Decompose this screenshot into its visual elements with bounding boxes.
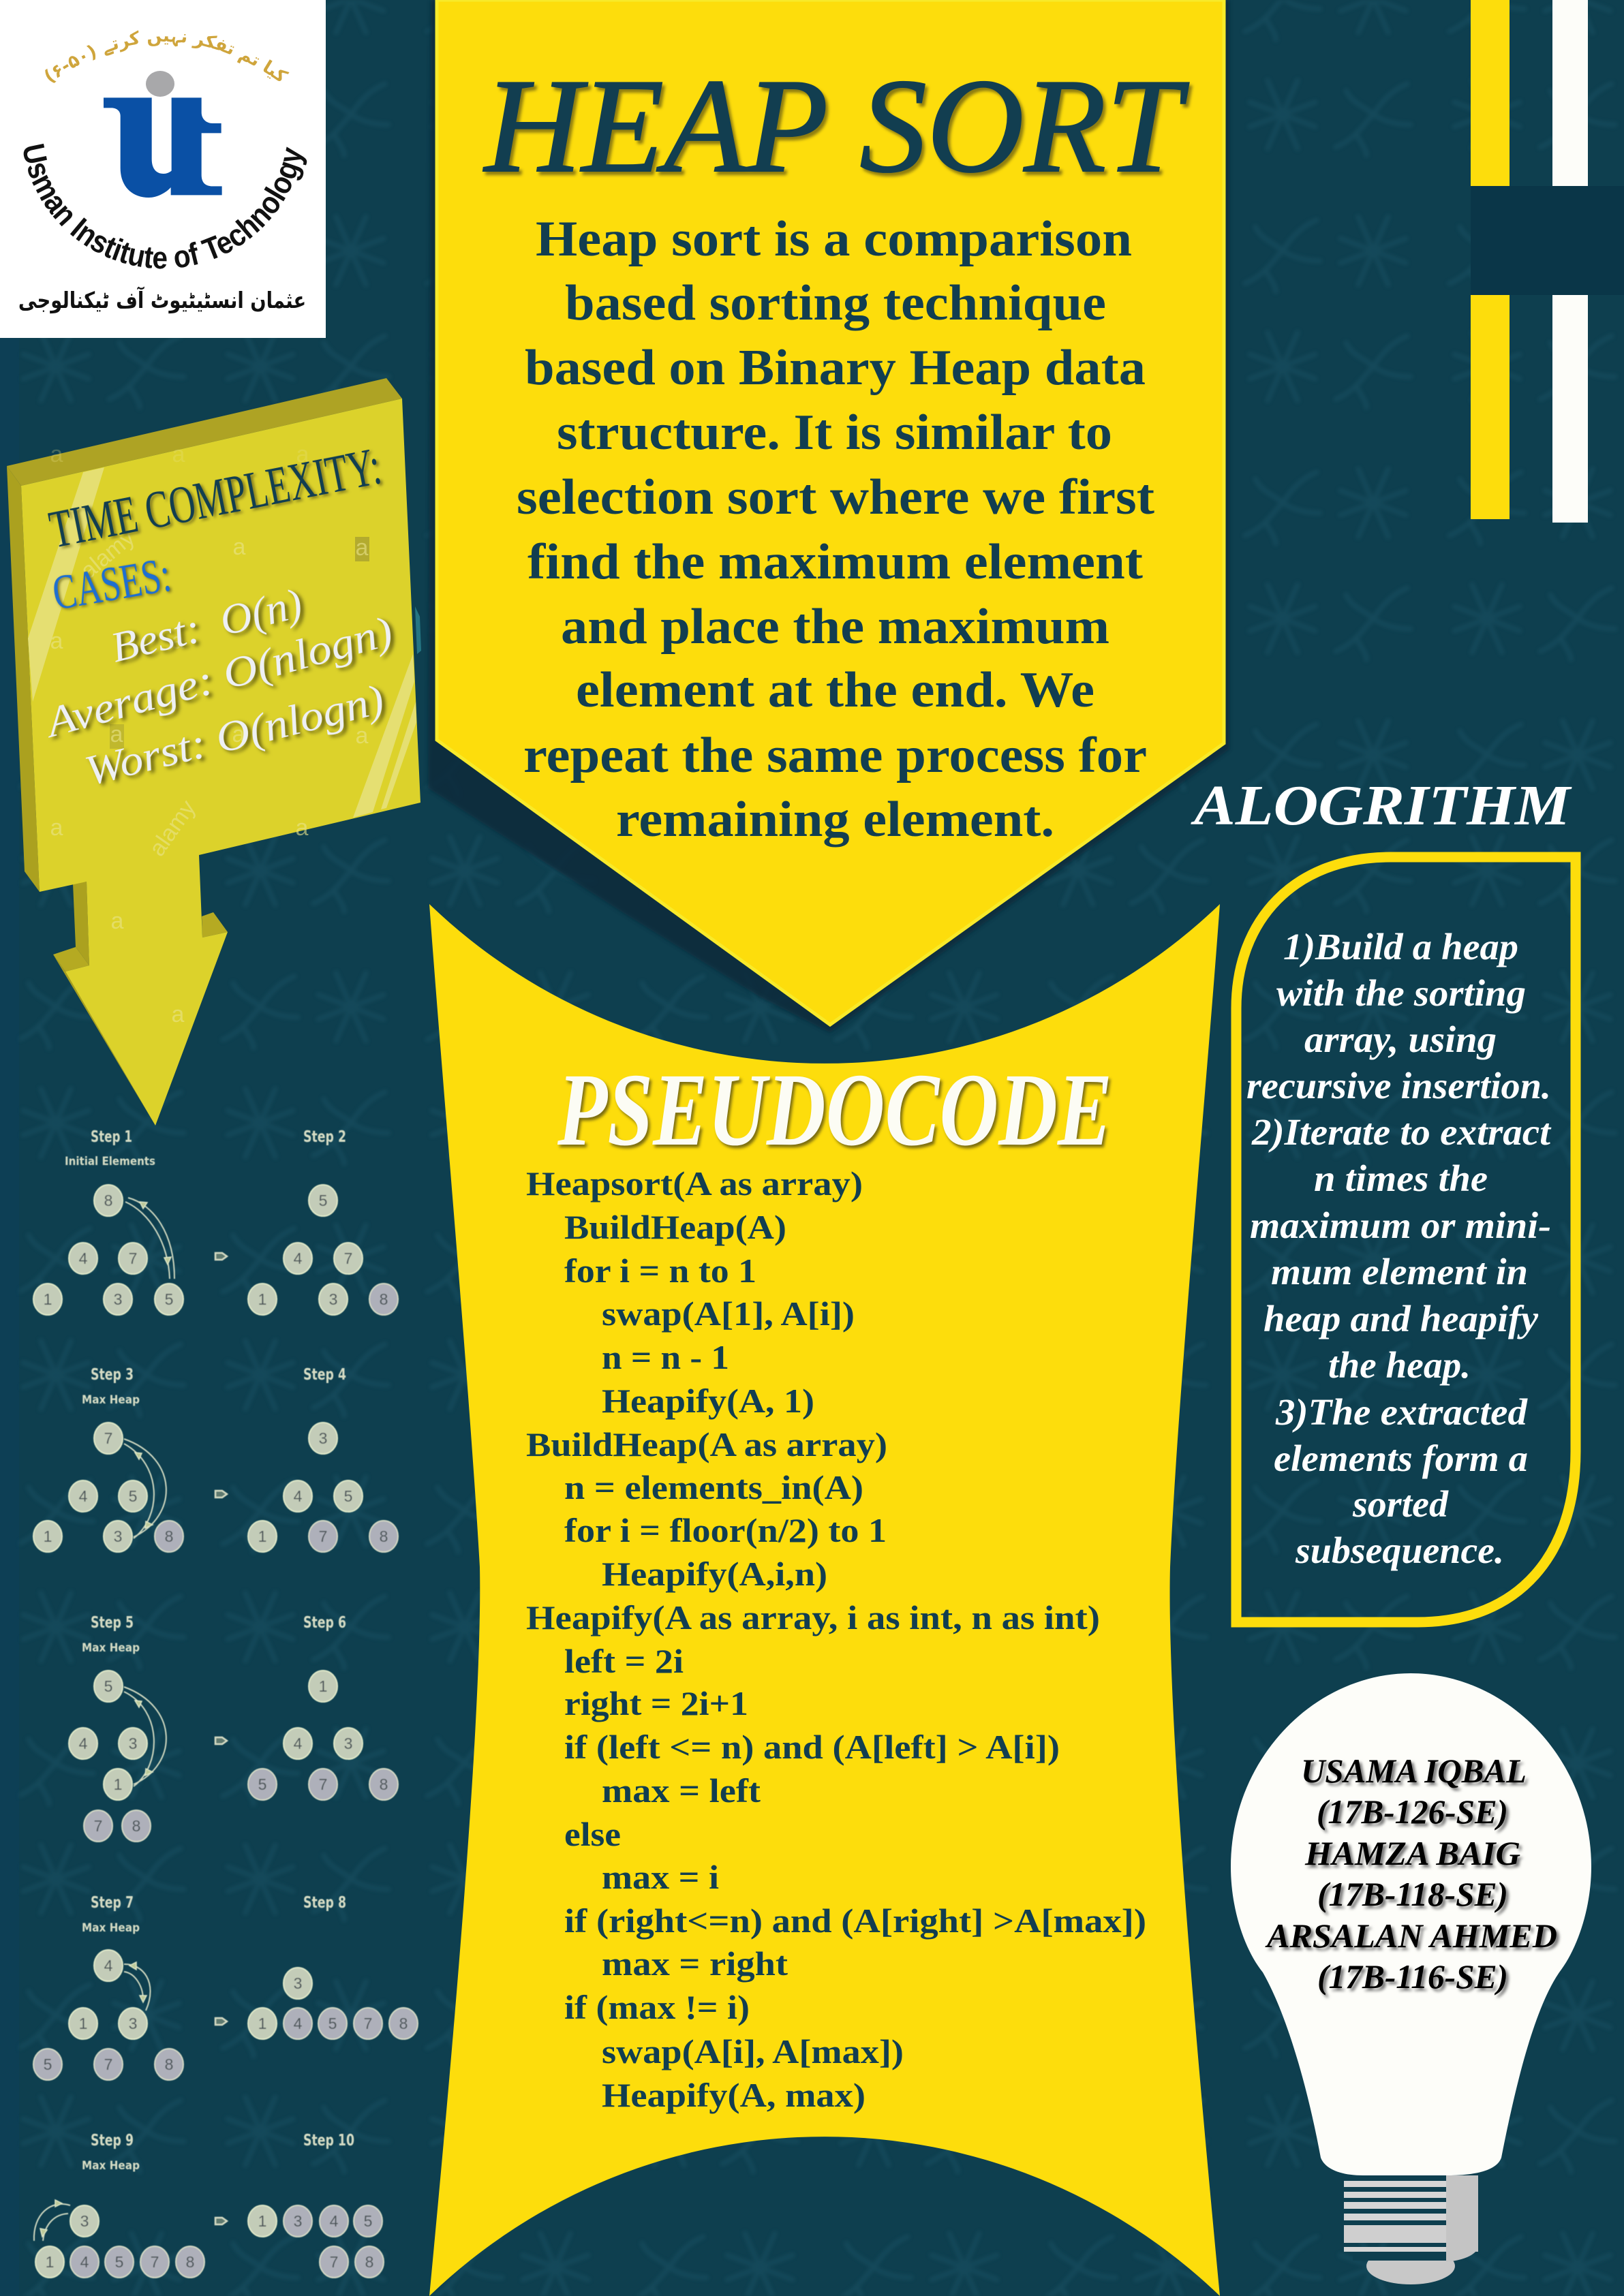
step 2: 1 [258, 1290, 266, 1308]
step 9: 7 [151, 2253, 159, 2271]
algorithm text: 1)Build a heap [1283, 926, 1518, 967]
step 1 [33, 1128, 183, 1315]
step 6: 7 [319, 1775, 327, 1793]
worst case: Worst: O(nlogn) [80, 677, 388, 795]
sign: watermarks: alamy [76, 525, 140, 584]
step 9: Max Heap [82, 2159, 140, 2173]
team names: (17B-118-SE) [1317, 1875, 1508, 1913]
step 3 [33, 1366, 183, 1552]
arrow [215, 2218, 227, 2224]
step 1: 8 [104, 1192, 112, 1209]
step 2: 8 [380, 1290, 388, 1308]
step 9: 5 [115, 2253, 123, 2271]
algorithm text: sorted [1352, 1483, 1450, 1525]
step 7: 7 [104, 2055, 112, 2073]
algorithm text: n times the [1314, 1158, 1488, 1199]
algorithm text: subsequence. [1295, 1530, 1504, 1571]
step 8 [248, 1894, 418, 2039]
sign: watermarks: a [50, 628, 63, 654]
step 2: 7 [344, 1250, 352, 1267]
step 9: 8 [186, 2253, 194, 2271]
sign: watermarks [50, 441, 369, 1027]
pseudocode lines: BuildHeap(A) [564, 1208, 786, 1246]
description text: selection sort where we first [517, 469, 1154, 525]
step 8: 8 [399, 2015, 408, 2032]
team names: USAMA IQBAL [1301, 1752, 1527, 1790]
step 3: Max Heap [82, 1393, 140, 1407]
algorithm text: 2)Iterate to extract [1251, 1111, 1552, 1153]
sign: watermarks: alamy [144, 796, 201, 861]
step 2: Step 2 [303, 1128, 346, 1146]
step 4 [248, 1366, 398, 1552]
pseudocode lines [526, 1164, 1146, 2114]
step 6: 4 [294, 1735, 303, 1752]
description text: repeat the same process for [523, 728, 1147, 784]
logo panel [0, 0, 326, 338]
logo: Urdu motto: کیا تم تفکر نہیں کرتے (۵۰-۶) [45, 30, 289, 83]
algorithm text: the heap. [1328, 1344, 1471, 1386]
logo: Urdu name: عثمان انسٹیٹیوٹ آف ٹیکنالوجی [18, 286, 306, 314]
algorithm text: maximum or mini- [1250, 1205, 1551, 1246]
pseudocode lines: Heapify(A as array, i as int, n as int) [526, 1598, 1100, 1636]
step 3: 1 [44, 1527, 52, 1545]
step 4: 5 [344, 1487, 352, 1505]
sign: watermarks: a [111, 908, 124, 934]
pseudocode lines: max = right [602, 1944, 788, 1983]
description text: structure. It is similar to [557, 405, 1112, 461]
step 8: 4 [294, 2015, 303, 2032]
step 8: 3 [294, 1974, 302, 1992]
step 1: 5 [165, 1290, 173, 1308]
step 8: 7 [364, 2015, 372, 2032]
sign: watermarks: a [296, 441, 309, 467]
step 5: 7 [94, 1817, 102, 1835]
description text: Heap sort is a comparison [536, 211, 1132, 267]
step 4: Step 4 [303, 1366, 346, 1384]
step 8: 1 [258, 2015, 266, 2032]
pseudocode lines: left = 2i [564, 1642, 684, 1680]
banner shadow [428, 0, 1229, 1033]
step 8: Step 8 [303, 1894, 346, 1912]
algorithm text: with the sorting [1276, 972, 1526, 1014]
pseudocode lines: for i = floor(n/2) to 1 [564, 1511, 887, 1549]
step 1: 3 [114, 1290, 122, 1308]
step 3: 8 [165, 1527, 173, 1545]
description text: remaining element. [616, 792, 1054, 848]
step 3: Step 3 [91, 1366, 134, 1384]
step 9: 1 [46, 2253, 54, 2271]
step 10: 3 [294, 2212, 302, 2230]
step 3: 3 [114, 1527, 122, 1545]
step 7: 4 [104, 1957, 113, 1974]
step 4: 1 [258, 1527, 266, 1545]
panel: heap sort banner [428, 0, 1229, 1033]
step 10: Step 10 [303, 2132, 354, 2150]
step 10: 1 [258, 2212, 266, 2230]
step 2: 4 [294, 1250, 303, 1267]
description text [517, 211, 1154, 848]
description text: and place the maximum [561, 599, 1109, 655]
step 7: Step 7 [91, 1894, 134, 1912]
pseudocode lines: n = elements_in(A) [564, 1468, 863, 1506]
sign heading: time complexity: TIME COMPLEXITY: [44, 436, 386, 559]
team names [1265, 1752, 1557, 1996]
step 6: 8 [380, 1775, 388, 1793]
arrow [215, 1253, 227, 1260]
step 10: 8 [365, 2253, 373, 2271]
algorithm text: mum element in [1271, 1251, 1528, 1292]
step 1: Step 1 [91, 1128, 132, 1146]
algorithm text: array, using [1304, 1019, 1497, 1060]
sign: watermarks: a [233, 534, 246, 560]
sign: watermarks: a [50, 815, 63, 841]
step 6: 5 [258, 1775, 266, 1793]
step 5: Max Heap [82, 1641, 140, 1655]
pseudocode lines: if (right<=n) and (A[right] >A[max]) [564, 1902, 1146, 1940]
sign: watermarks: a [172, 1002, 185, 1027]
description text: based sorting technique [565, 275, 1106, 331]
step 5: Step 5 [91, 1614, 134, 1632]
step 1: 7 [129, 1250, 137, 1267]
pseudocode lines: max = left [602, 1771, 761, 1810]
step 8: 5 [328, 2015, 337, 2032]
step 3: 4 [79, 1487, 88, 1505]
bulb glass [1231, 1673, 1591, 2175]
description text: element at the end. We [576, 662, 1094, 718]
pseudocode lines: Heapify(A, max) [602, 2076, 865, 2114]
decorative stripes top right [1471, 0, 1624, 523]
pseudocode lines: Heapsort(A as array) [526, 1164, 863, 1203]
title: HEAP SORT [482, 51, 1189, 200]
description text: based on Binary Heap data [525, 340, 1146, 396]
step 5 [69, 1614, 166, 1842]
pseudocode lines: Heapify(A, 1) [602, 1382, 814, 1420]
step 6: 3 [344, 1735, 352, 1752]
logo: UT mark [104, 71, 222, 198]
sign: watermarks: a [172, 628, 185, 654]
pseudocode lines: right = 2i+1 [564, 1684, 748, 1722]
step 7: 5 [44, 2055, 52, 2073]
team names: (17B-126-SE) [1317, 1793, 1508, 1831]
pseudocode lines: swap(A[i], A[max]) [602, 2032, 904, 2070]
team names: (17B-116-SE) [1317, 1957, 1508, 1996]
algorithm text: heap and heapify [1263, 1298, 1539, 1339]
logo: institute name on arc: Usman Institute of Technology [23, 143, 307, 269]
algorithm text: 3)The extracted [1275, 1391, 1529, 1433]
step 9: Step 9 [91, 2132, 134, 2150]
sign: watermarks: a [356, 535, 369, 561]
pseudocode lines: swap(A[1], A[i]) [602, 1294, 855, 1333]
team names: ARSALAN AHMED [1265, 1917, 1557, 1955]
algorithm frame [1236, 857, 1576, 1622]
best case: Best: O(n) [106, 580, 307, 672]
step 6: 1 [319, 1677, 327, 1695]
step 9 [34, 2132, 204, 2278]
pseudocode lines: else [564, 1815, 621, 1853]
panel: pseudocode [429, 904, 1220, 2296]
step 4: 8 [380, 1527, 388, 1545]
sign: watermarks: a [232, 722, 245, 747]
step 4: 4 [294, 1487, 303, 1505]
sign: watermarks: a [110, 722, 123, 747]
arrow [215, 2018, 227, 2025]
step 1: 4 [79, 1250, 88, 1267]
arrow [215, 1737, 227, 1744]
pseudocode lines: BuildHeap(A as array) [526, 1425, 887, 1463]
step 5: 4 [79, 1735, 88, 1752]
pseudocode lines: Heapify(A,i,n) [602, 1555, 827, 1593]
heading: algorithm: ALOGRITHM [1191, 774, 1573, 837]
algorithm text: elements form a [1274, 1438, 1528, 1479]
sign: watermarks: a [356, 723, 369, 749]
step 9: 4 [80, 2253, 89, 2271]
step 3: 5 [129, 1487, 137, 1505]
sign: watermarks: a [296, 815, 309, 841]
step 3: 7 [104, 1429, 112, 1447]
step 5: 1 [114, 1775, 122, 1793]
pseudocode background shape [429, 904, 1220, 2296]
pseudocode lines: max = i [602, 1858, 719, 1896]
heap sort step diagrams [33, 1128, 418, 2278]
step 5: 3 [129, 1735, 137, 1752]
sign: watermarks: a [50, 441, 63, 467]
step 10: 5 [364, 2212, 372, 2230]
description text: find the maximum element [527, 534, 1143, 590]
step 2 [248, 1128, 398, 1315]
step 7: 8 [165, 2055, 173, 2073]
pseudocode heading: PSEUDOCODE [557, 1053, 1112, 1168]
step 6 [248, 1614, 398, 1800]
light bulb with team names [1231, 1673, 1591, 2284]
pseudocode lines: n = n - 1 [602, 1338, 729, 1376]
algorithm text: recursive insertion. [1246, 1065, 1551, 1106]
panel: algorithm steps [1236, 857, 1576, 1622]
bulb base [1344, 2175, 1478, 2284]
average case: Average: O(nlogn) [39, 608, 397, 747]
algorithm text [1246, 926, 1552, 1571]
step 1: 1 [44, 1290, 52, 1308]
step 7: Max Heap [82, 1921, 140, 1935]
step 2: 5 [319, 1192, 327, 1209]
arrow [215, 1491, 227, 1498]
step 10 [248, 2132, 384, 2278]
sign: 3D board and arrow [7, 378, 421, 1126]
step 1: Initial Elements [65, 1155, 155, 1168]
step 10: 7 [330, 2253, 338, 2271]
step 4: 3 [319, 1429, 327, 1447]
step 5: 8 [132, 1817, 140, 1835]
pseudocode lines: for i = n to 1 [564, 1252, 756, 1290]
step 7 [33, 1894, 183, 2080]
sign: watermarks: a [172, 441, 185, 467]
step 7: 3 [129, 2015, 137, 2032]
sign: time complexity [7, 378, 421, 1126]
pseudocode lines: if (left <= n) and (A[left] > A[i]) [564, 1728, 1060, 1766]
banner shape [437, 0, 1224, 1025]
step 5: 5 [104, 1677, 112, 1695]
step 10: 4 [330, 2212, 339, 2230]
team names: HAMZA BAIG [1304, 1834, 1520, 1872]
step 9: 3 [80, 2212, 89, 2230]
sign subheading: cases: CASES: [48, 547, 174, 621]
step 6: Step 6 [303, 1614, 346, 1632]
step 2: 3 [329, 1290, 337, 1308]
step 4: 7 [319, 1527, 327, 1545]
step 7: 1 [79, 2015, 87, 2032]
pseudocode lines: if (max != i) [564, 1988, 750, 2026]
